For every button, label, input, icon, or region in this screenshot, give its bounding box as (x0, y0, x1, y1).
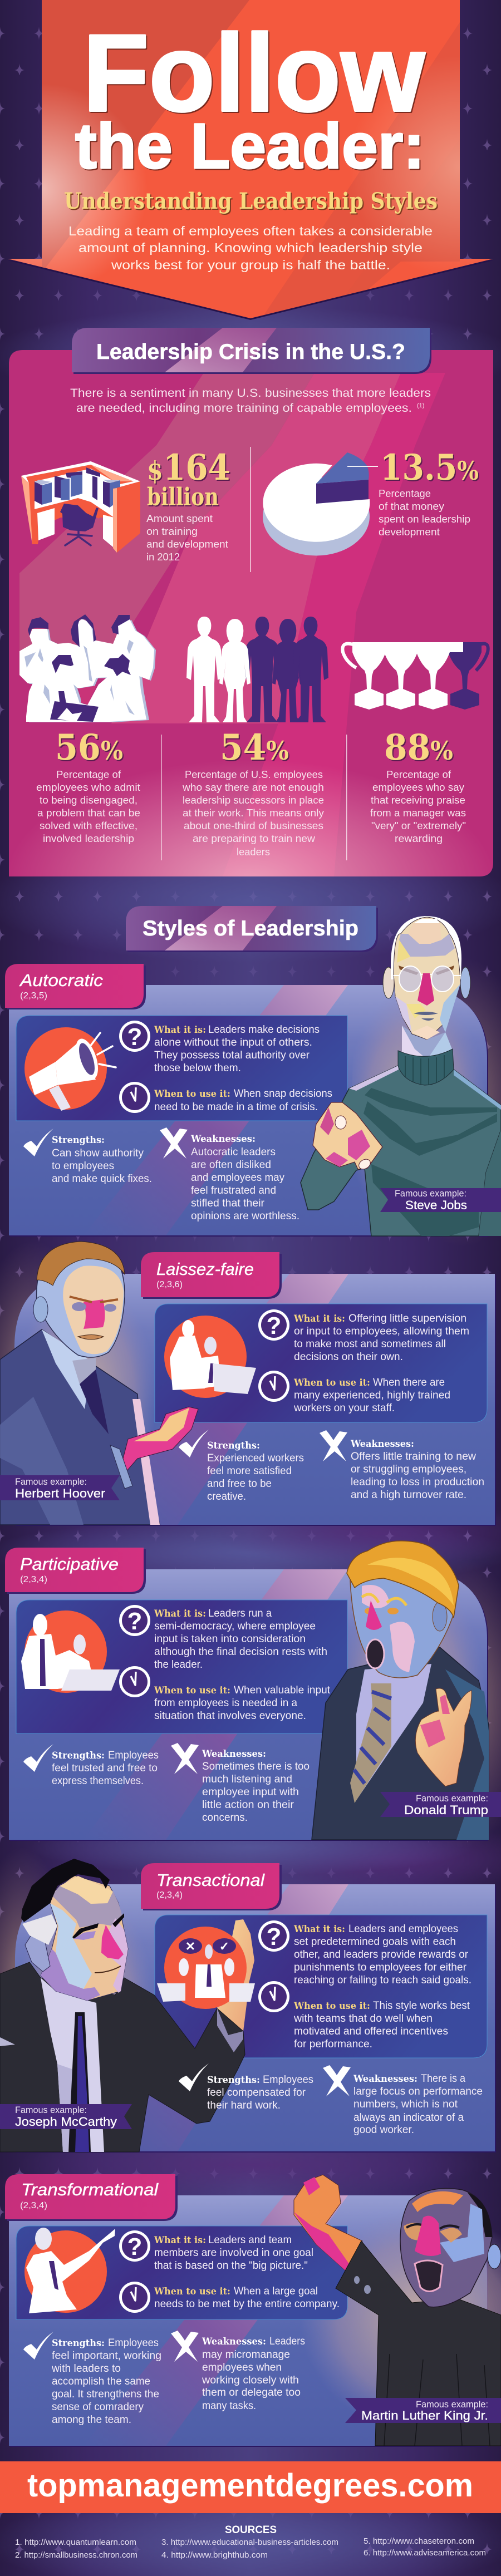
crisis intro text: are needed, including more training of capable employees. (76, 402, 412, 415)
icon: cross (171, 1743, 199, 1774)
icon: check (23, 1129, 53, 1156)
what it is text: that is based on the "big picture." (154, 2260, 308, 2272)
when to use text: When snap decisions (234, 1088, 332, 1100)
hand: open palm (123, 1407, 198, 1471)
stat: 88 percent: rewarding (395, 833, 443, 844)
strengths (51, 2337, 161, 2426)
subtitle: Understanding Leadership Styles (64, 188, 438, 214)
label: donald trump: Donald Trump (404, 1803, 488, 1817)
icon: trophies (342, 642, 488, 710)
what it is text: Leaders run a (208, 1608, 272, 1619)
what it is text: other, and leaders provide rewards or (294, 1949, 469, 1961)
stat: 164 billion (146, 447, 230, 563)
strengths: creative. (207, 1491, 246, 1503)
title (75, 12, 425, 182)
panel: leadership crisis (9, 350, 493, 876)
weaknesses (202, 2336, 305, 2412)
crisis intro text (70, 387, 431, 415)
strengths: to employees (52, 1160, 114, 1172)
heading: styles of leadership (126, 906, 376, 950)
weaknesses: stifled that their (191, 1198, 265, 1209)
what it is text: They possess total authority over (154, 1050, 310, 1061)
panel: participative (5, 1548, 487, 1840)
strengths: accomplish the same (52, 2376, 150, 2387)
what it is text: those below them. (154, 1062, 241, 1074)
sources: 2. http://smallbusiness.chron.com (15, 2550, 137, 2560)
strengths: and make quick fixes. (52, 1173, 152, 1185)
weaknesses: may micromanage (202, 2349, 290, 2361)
icon: people at laptop (164, 1316, 256, 1398)
stat: 54 percent: 54% (220, 727, 289, 769)
sources: 3. http://www.educational-business-articles.com (161, 2538, 338, 2547)
strengths: their hard work. (207, 2100, 281, 2111)
weaknesses: large focus on performance (353, 2086, 483, 2097)
what it is text: Offering little supervision (348, 1313, 466, 1324)
icon: question: ? (127, 2233, 142, 2260)
when to use text: from employees is needed in a (154, 1697, 297, 1709)
stat: 88 percent: "very" or "extremely" (371, 820, 466, 831)
sources (15, 2524, 486, 2560)
stat: 164 billion: $164 (147, 447, 230, 489)
weaknesses: employees when (202, 2362, 282, 2373)
icon: clock (119, 1082, 150, 1113)
what it is text: set predetermined goals with each (294, 1936, 456, 1948)
intro text (68, 224, 433, 272)
footer url band (0, 2461, 501, 2513)
panel: autocratic (5, 964, 487, 1235)
strengths (52, 1135, 152, 1185)
when to use text: many experienced, highly trained (294, 1390, 450, 1401)
stat: 88 percent: from a manager was (370, 807, 466, 819)
heading: leadership crisis: Leadership Crisis in the U.S.? (96, 340, 405, 364)
panel: laissez-faire (14, 1252, 495, 1525)
figure: steve jobs (301, 916, 501, 1236)
strengths: and free to be (207, 1478, 272, 1490)
heading: leadership crisis (72, 328, 430, 372)
strengths (207, 2074, 313, 2111)
label: joseph mccarthy: Famous example: (15, 2105, 87, 2115)
when to use text (154, 2286, 340, 2310)
weaknesses: little action on their (202, 1799, 294, 1811)
figure: herbert hoover (0, 1242, 198, 1525)
icon: orator (24, 2228, 115, 2313)
weaknesses: Weaknesses: (350, 1439, 414, 1450)
strengths: sense of comradery (52, 2401, 144, 2413)
stat: 56 percent: 56% (55, 727, 123, 769)
strengths: express themselves. (52, 1775, 144, 1787)
crisis intro text: (1) (417, 402, 424, 409)
tab: transformational: (2,3,4) (20, 2201, 47, 2210)
weaknesses: Weaknesses: (190, 1134, 256, 1145)
what it is text (154, 1608, 327, 1671)
when to use text (293, 2000, 470, 2050)
tab: transformational (5, 2174, 175, 2219)
stat: 56 percent: to being disengaged, (40, 794, 137, 806)
tab: participative: Participative (20, 1554, 119, 1574)
strengths: Strengths: (207, 1440, 260, 1451)
tab: autocratic (5, 964, 144, 1008)
weaknesses: Offers little training to new (351, 1451, 476, 1462)
sources: 4. http://www.brighthub.com (161, 2550, 268, 2560)
intro text: amount of planning. Knowing which leadership style (78, 240, 423, 255)
intro text: Leading a team of employees often takes a considerable (68, 224, 433, 238)
what it is text: members are involved in one goal (154, 2247, 313, 2259)
weaknesses: working closely with (202, 2375, 299, 2386)
icon: question (119, 2230, 150, 2262)
sources: 1. http://www.quantumlearn.com (15, 2538, 136, 2547)
what it is text: Leaders and employees (348, 1923, 458, 1935)
strengths: feel trusted and free to (52, 1762, 158, 1774)
weaknesses: Weaknesses: (353, 2073, 418, 2085)
weaknesses: many tasks. (202, 2400, 256, 2412)
icon: team with decisions (157, 1927, 255, 2009)
what it is text: What it is: (293, 1924, 345, 1935)
label: martin luther king jr: Martin Luther King Jr. (361, 2408, 488, 2422)
stat: 56 percent: Percentage of (56, 769, 121, 780)
icon: team with decisions: ✓ (219, 1939, 229, 1953)
panel: transactional (15, 1863, 495, 2151)
icon: team around laptop (21, 1610, 120, 1693)
tab: laissez-faire: (2,3,6) (156, 1280, 183, 1289)
weaknesses: and employees may (191, 1172, 284, 1184)
when to use text: When to use it: (154, 1088, 230, 1100)
header arrow banner (0, 0, 501, 320)
what it is text (293, 1313, 469, 1363)
tab: participative: (2,3,4) (20, 1575, 47, 1584)
icon: megaphone (24, 1027, 116, 1111)
icon: check (23, 1744, 53, 1772)
what it is text: to make most and sometimes all (294, 1338, 446, 1350)
strengths: among the team. (52, 2414, 131, 2426)
tab: autocratic: (2,3,5) (20, 991, 47, 1001)
what it is text: Leaders and team (208, 2234, 292, 2246)
box: what and when (155, 1915, 487, 2058)
weaknesses: employee input with (202, 1786, 299, 1798)
what it is text: although the final decision rests with (154, 1646, 327, 1658)
label: martin luther king jr (345, 2398, 501, 2423)
icon: clock (119, 1666, 150, 1697)
stat: 13.5 percent: spent on leadership (379, 513, 470, 525)
when to use text: When to use it: (293, 1377, 370, 1388)
sources: 6. http://www.adviseamerica.com (364, 2548, 486, 2558)
icon: clock (258, 1371, 289, 1402)
weaknesses: feel frustrated and (191, 1185, 276, 1196)
weaknesses: and a high turnover rate. (351, 1489, 466, 1501)
when to use text: This style works best (373, 2000, 470, 2012)
strengths: Strengths: (52, 2338, 105, 2349)
weaknesses: Weaknesses: (202, 2336, 266, 2347)
stat: 88 percent: Percentage of (386, 769, 451, 780)
what it is text: alone without the input of others. (154, 1037, 312, 1048)
when to use text (154, 1685, 331, 1722)
what it is text: input is taken into consideration (154, 1633, 306, 1645)
what it is text: What it is: (154, 2235, 206, 2246)
icon: silhouettes of employees (186, 617, 328, 722)
stat: 13.5 percent: of that money (379, 500, 445, 512)
weaknesses (202, 1748, 310, 1824)
when to use text: needs to be met by the entire company. (154, 2298, 340, 2310)
title: Follow (83, 12, 425, 134)
when to use text: When to use it: (154, 2286, 230, 2297)
what it is text: the leader. (154, 1659, 203, 1671)
stat: 13.5 percent: Percentage (379, 487, 431, 499)
figure: donald trump (312, 1541, 501, 1840)
icon: team with decisions: ✕ (185, 1939, 195, 1953)
stat: 56 percent: a problem that can be (37, 807, 140, 819)
weaknesses: are often disliked (191, 1159, 271, 1171)
when to use text: with teams that do well when (293, 2013, 433, 2025)
strengths: Experienced workers (207, 1452, 304, 1464)
stat: 54 percent: who say there are not enough (182, 781, 324, 793)
when to use text: situation that involves everyone. (154, 1710, 306, 1722)
stat: 164 billion: Amount spent (146, 513, 213, 524)
stat: 54 percent (182, 727, 325, 858)
weaknesses (350, 1439, 484, 1501)
icon: question: ? (267, 1312, 281, 1339)
stat: 54 percent: Percentage of U.S. employees (185, 769, 323, 780)
label: herbert hoover (0, 1475, 120, 1500)
label: martin luther king jr: Famous example: (416, 2399, 488, 2410)
when to use text (293, 1377, 450, 1414)
tab: autocratic: Autocratic (19, 971, 104, 990)
what it is text: punishments to employees for either (294, 1962, 467, 1973)
weaknesses: Leaders (269, 2336, 305, 2347)
strengths: with leaders to (51, 2363, 121, 2375)
label: herbert hoover: Famous example: (15, 1476, 87, 1487)
strengths: Employees (263, 2074, 313, 2086)
when to use text: motivated and offered incentives (294, 2026, 448, 2037)
stat: 54 percent: are preparing to train new (193, 833, 316, 844)
label: joseph mccarthy: Joseph McCarthy (15, 2115, 117, 2129)
chart: pie 13.5 percent (263, 452, 378, 555)
weaknesses: Autocratic leaders (191, 1146, 276, 1158)
crisis intro text: There is a sentiment in many U.S. businesses that more leaders (70, 387, 431, 400)
stat: 164 billion: in 2012 (146, 551, 180, 563)
box: what and when (16, 1016, 347, 1121)
label: steve jobs: Steve Jobs (405, 1198, 467, 1212)
strengths: feel compensated for (207, 2087, 306, 2099)
when to use text: When to use it: (154, 1685, 230, 1696)
stat: 56 percent: solved with effective, (40, 820, 137, 831)
icon part: chair (60, 504, 99, 545)
when to use text: need to be made in a time of crisis. (154, 1101, 318, 1113)
sources: SOURCES (225, 2524, 277, 2536)
stat: 56 percent (36, 727, 140, 844)
transactional content (157, 1920, 483, 2136)
what it is text: reaching or failing to reach said goals. (294, 1974, 471, 1986)
stat: 164 billion: and development (146, 538, 228, 550)
tab: transactional: (2,3,4) (156, 1890, 183, 1900)
strengths (52, 1750, 159, 1787)
icon: question (258, 1309, 289, 1341)
heading: styles of leadership: Styles of Leadership (143, 917, 358, 940)
footer url band: topmanagementdegrees.com (27, 2467, 473, 2504)
strengths (207, 1440, 304, 1503)
stat: 88 percent: that receiving praise (371, 794, 465, 806)
figure: joseph mccarthy (0, 1859, 254, 2152)
icon: cross (323, 2065, 351, 2096)
stat: 13.5 percent: 13.5% (380, 447, 479, 489)
icon: disengaged employees (19, 614, 156, 722)
figure: martin luther king jr (294, 2175, 501, 2446)
hand: pointing (313, 1102, 382, 1169)
what it is text: semi-democracy, where employee (154, 1621, 316, 1632)
hand: thumb pointing (415, 1688, 471, 1786)
box: what and when (155, 1304, 487, 1422)
strengths: feel more satisfied (207, 1465, 292, 1477)
weaknesses: leading to loss in production (351, 1476, 484, 1488)
tab: transactional: Transactional (156, 1870, 265, 1890)
what it is text: decisions on their own. (294, 1351, 403, 1363)
label: steve jobs: Famous example: (395, 1188, 466, 1199)
stat: 54 percent: leadership successors in place (183, 794, 324, 806)
stat: 13.5 percent (379, 447, 479, 538)
stat: 54 percent: at their work. This means only (183, 807, 325, 819)
weaknesses: always an indicator of a (353, 2112, 464, 2124)
box: what and when (16, 2226, 347, 2319)
stat: 54 percent: about one-third of businesses (184, 820, 323, 831)
when to use text: When a large goal (234, 2286, 318, 2297)
stat: 164 billion: on training (146, 525, 198, 537)
icon: office cubicle with money (21, 461, 140, 553)
tab: laissez-faire: Laissez-faire (156, 1259, 254, 1279)
panel: transformational (5, 2174, 501, 2446)
icon: question: ? (127, 1023, 142, 1051)
title: the Leader: (75, 111, 425, 182)
icon: question: ? (127, 1608, 142, 1635)
weaknesses: good worker. (353, 2124, 414, 2136)
tab: transformational: Transformational (21, 2180, 159, 2199)
stat: 164 billion: billion (147, 483, 219, 511)
when to use text: workers on your staff. (293, 1402, 395, 1414)
strengths: Strengths: (207, 2075, 260, 2086)
label: donald trump: Famous example: (416, 1793, 488, 1804)
strengths: Employees (108, 2337, 159, 2349)
sources: 5. http://www.chaseteron.com (364, 2536, 474, 2546)
stat: 56 percent: involved leadership (43, 833, 134, 844)
strengths: feel important, working (52, 2350, 161, 2362)
when to use text (154, 1088, 332, 1113)
stat: 13.5 percent: development (379, 526, 440, 538)
weaknesses: them or delegate too (202, 2387, 301, 2398)
icon: check (23, 2332, 53, 2360)
what it is text (154, 1024, 320, 1074)
intro text: works best for your group is half the battle. (111, 258, 390, 272)
icon: cross (160, 1127, 188, 1159)
icon: question (119, 1021, 150, 1052)
what it is text (293, 1923, 471, 1986)
stat: 88 percent: 88% (384, 727, 453, 769)
what it is text: What it is: (154, 1025, 206, 1036)
tab: laissez-faire (141, 1252, 279, 1297)
weaknesses: concerns. (202, 1812, 248, 1824)
strengths: goal. It strengthens the (52, 2388, 159, 2400)
weaknesses: Weaknesses: (202, 1748, 266, 1760)
icon: question (258, 1920, 289, 1952)
stat: 54 percent: leaders (237, 846, 270, 858)
icon: cross (171, 2331, 199, 2362)
icon: cross (320, 1430, 347, 1461)
label: joseph mccarthy (0, 2104, 132, 2129)
tab: transactional (141, 1863, 279, 1909)
icon: check (179, 1430, 209, 1457)
weaknesses: Sometimes there is too (202, 1761, 310, 1772)
when to use text: for performance. (294, 2038, 372, 2050)
when to use text: When there are (373, 1377, 445, 1388)
weaknesses: or struggling employees, (351, 1464, 466, 1475)
weaknesses (190, 1134, 299, 1222)
stat: 56 percent: employees who admit (36, 781, 140, 793)
icon: question (119, 1605, 150, 1636)
icon: clock (119, 2282, 150, 2313)
what it is text: or input to employees, allowing them (294, 1326, 469, 1337)
weaknesses (353, 2073, 483, 2136)
what it is text (154, 2234, 313, 2272)
stat: 88 percent: employees who say (372, 781, 465, 793)
what it is text: What it is: (293, 1313, 345, 1324)
strengths: Employees (108, 1750, 159, 1761)
tab: participative (5, 1548, 144, 1592)
stat: 88 percent (370, 727, 466, 844)
what it is text: What it is: (154, 1608, 206, 1619)
label: herbert hoover: Herbert Hoover (15, 1486, 105, 1500)
when to use text: When valuable input (234, 1685, 331, 1696)
what it is text: Leaders make decisions (208, 1024, 320, 1036)
icon: check (179, 2063, 209, 2091)
weaknesses: There is a (421, 2073, 465, 2085)
strengths: Can show authority (52, 1147, 144, 1159)
when to use text: When to use it: (293, 2001, 370, 2012)
weaknesses: opinions are worthless. (191, 1210, 299, 1222)
label: steve jobs (380, 1188, 501, 1212)
label: donald trump (380, 1792, 501, 1817)
box: what and when (16, 1600, 347, 1733)
icon: question: ? (267, 1923, 281, 1951)
weaknesses: much listening and (202, 1774, 292, 1785)
weaknesses: numbers, which is not (353, 2099, 458, 2110)
icon: clock (258, 1981, 289, 2012)
strengths: Strengths: (52, 1135, 105, 1146)
strengths: Strengths: (52, 1750, 105, 1761)
